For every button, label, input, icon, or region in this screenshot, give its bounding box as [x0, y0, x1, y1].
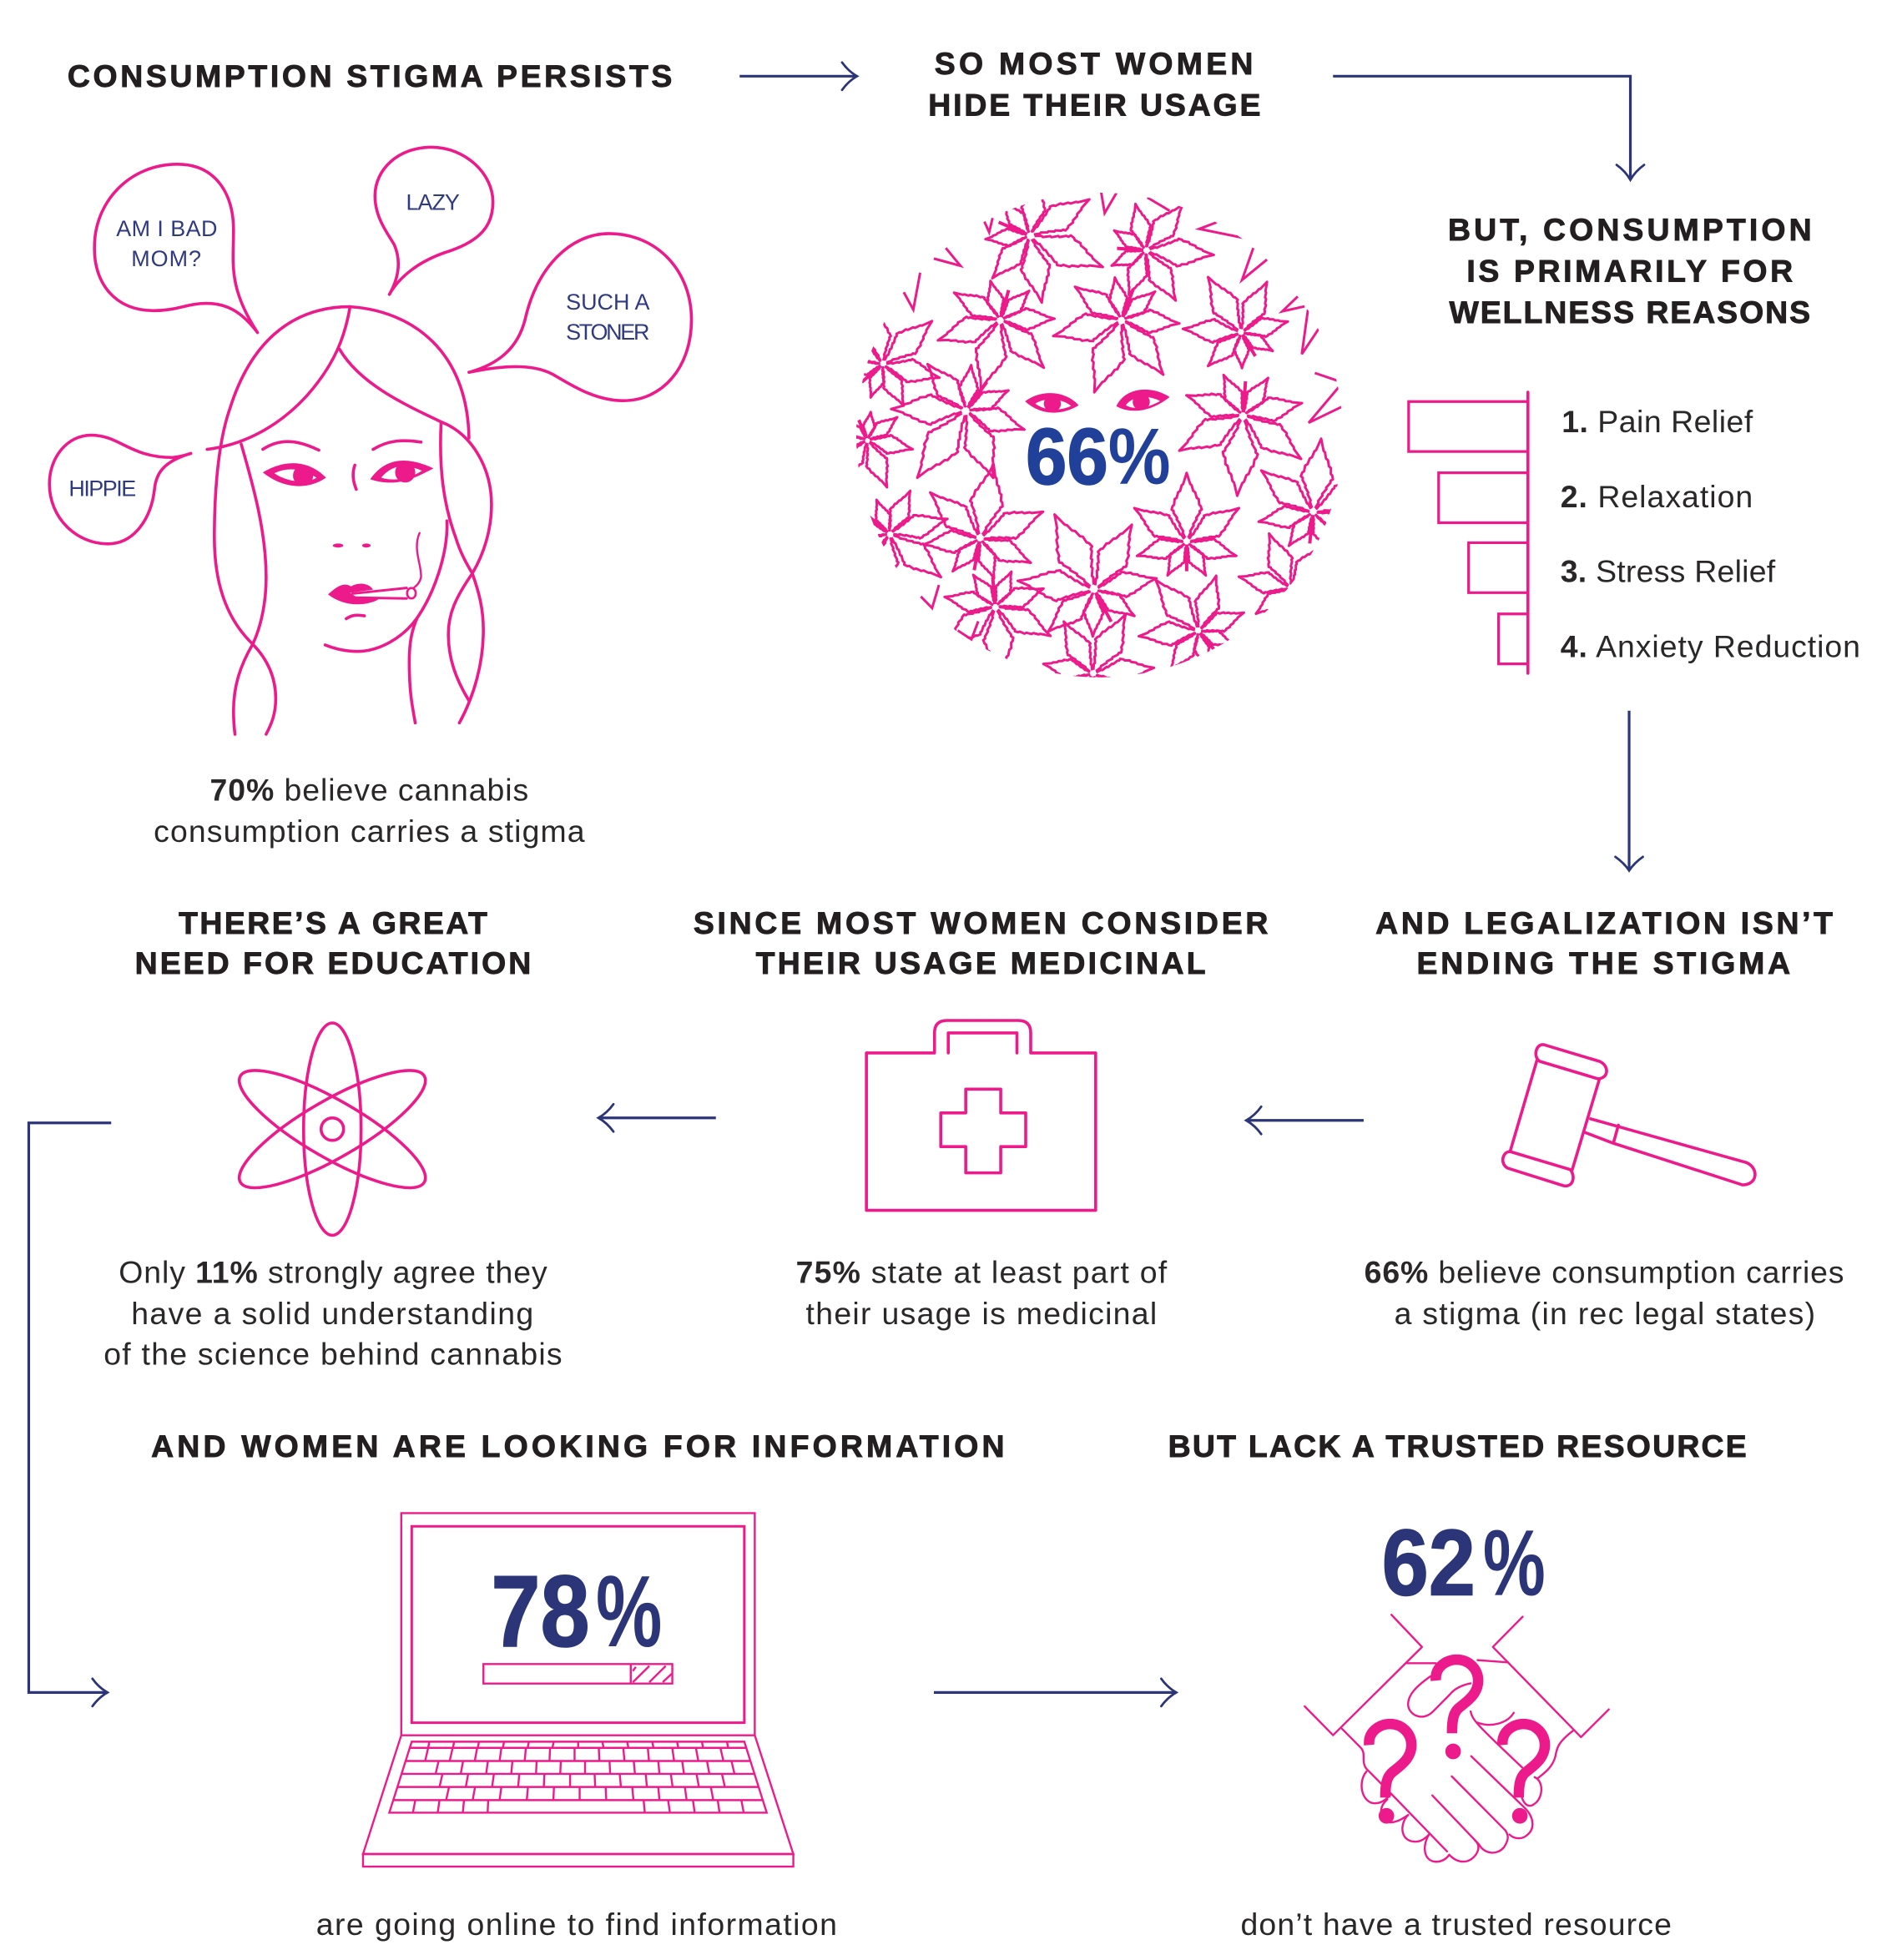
watching eyes: [1025, 390, 1169, 413]
bubble text: such a stoner: [566, 290, 649, 345]
bubble text: am I bad mom: MOM?: [131, 246, 201, 271]
bubble text: am I bad mom: AM I BAD: [116, 216, 217, 241]
stat text: 70 percent: [154, 773, 585, 849]
icon: atom: [226, 1023, 439, 1235]
arrow: medicinal to education: [598, 1104, 716, 1131]
heading: but consumption is primarily for wellness reasons: [1448, 212, 1812, 330]
bubble text: such a stoner: SUCH A: [566, 290, 649, 315]
stat text: 66 percent in legal states: [1365, 1254, 1844, 1331]
stat text: only 11 percent: have a solid understanding: [131, 1296, 533, 1331]
78% stat: %: [596, 1554, 662, 1668]
leaf cluster: [815, 159, 1385, 733]
66% stat: [1026, 412, 1171, 501]
icon: gavel: [1503, 1045, 1755, 1186]
speech bubble outlines: [49, 147, 691, 544]
laptop body: [363, 1513, 794, 1867]
question mark: centre: [1435, 1660, 1478, 1759]
heading: so most women hide their usage: SO MOST WOMEN: [935, 46, 1253, 81]
hands: [1304, 1615, 1609, 1862]
illustration: woman with speech bubbles: [49, 147, 691, 734]
stat text: only 11 percent: Only 11% strongly agree they: [119, 1254, 547, 1289]
question mark: right: [1502, 1724, 1545, 1824]
stat text: only 11 percent: [103, 1254, 563, 1371]
ranked list of reasons: 1. Pain Relief: [1561, 404, 1753, 439]
62% stat: [1382, 1510, 1546, 1615]
arrow: legalization to medicinal: [1246, 1106, 1364, 1134]
bubble text: hippie: HIPPIE: [68, 476, 136, 501]
heading: so most women hide their usage: HIDE THEIR USAGE: [928, 87, 1260, 122]
heading: so most women hide their usage: [928, 46, 1260, 122]
78% stat: [491, 1554, 662, 1668]
heading: there's a great need for education: THERE’S A GREAT: [179, 905, 487, 940]
78% stat: 78: [491, 1554, 590, 1668]
62% stat: 62: [1382, 1510, 1476, 1615]
heading: there's a great need for education: [135, 905, 531, 980]
stat text: 75 percent medicinal: [796, 1254, 1168, 1331]
heading: and legalization isn't ending the stigma: [1375, 905, 1833, 980]
heading: since most women consider their usage medicinal: THEIR USAGE MEDICINAL: [756, 945, 1206, 980]
ranked list of reasons: 3. Stress Relief: [1561, 554, 1776, 589]
bubble text: am I bad mom: [116, 216, 217, 271]
stat text: only 11 percent: of the science behind cannabis: [103, 1336, 563, 1371]
stat text: 66 percent in legal states: a stigma (in rec legal states): [1395, 1296, 1815, 1331]
62% stat: %: [1483, 1510, 1546, 1615]
heading: and legalization isn't ending the stigma: AND LEGALIZATION ISN’T: [1375, 905, 1833, 940]
heading: but consumption is primarily for wellness reasons: IS PRIMARILY FOR: [1466, 254, 1793, 289]
arrow: information to resource: [934, 1679, 1176, 1706]
heading: and legalization isn't ending the stigma: ENDING THE STIGMA: [1417, 945, 1790, 980]
caption: no trusted resource: don’t have a trusted resource: [1240, 1907, 1672, 1942]
stat text: 75 percent medicinal: their usage is medicinal: [806, 1296, 1157, 1331]
icon: laptop with 78%: [363, 1513, 794, 1867]
heading: and women are looking for information: AND WOMEN ARE LOOKING FOR INFORMATION: [151, 1428, 1005, 1464]
face and hair: [207, 307, 492, 734]
caption: going online: are going online to find information: [316, 1907, 837, 1942]
heading: but consumption is primarily for wellness reasons: BUT, CONSUMPTION: [1448, 212, 1812, 247]
bubble text: such a stoner: STONER: [566, 320, 649, 345]
66% stat: %: [1108, 412, 1171, 501]
illustration: circle of cannabis leaves with 66%: [815, 159, 1385, 733]
ranked list of reasons: 2. Relaxation: [1561, 479, 1753, 514]
heading: but lack a trusted resource: BUT LACK A TRUSTED RESOURCE: [1168, 1428, 1747, 1464]
heading: there's a great need for education: NEED FOR EDUCATION: [135, 945, 531, 980]
icon: first aid kit: [866, 1020, 1096, 1211]
stat text: 70 percent: 70% believe cannabis: [210, 773, 528, 808]
progress bar: [483, 1664, 673, 1684]
arrow: wellness to legalization: [1616, 711, 1642, 870]
arrow: education to information: [28, 1123, 111, 1706]
question mark: left: [1369, 1724, 1411, 1824]
ranked list of reasons: [1561, 404, 1860, 663]
heading: consumption stigma persists: CONSUMPTION STIGMA PERSISTS: [68, 58, 672, 93]
heading: since most women consider their usage medicinal: SINCE MOST WOMEN CONSIDER: [694, 905, 1268, 940]
heading: since most women consider their usage medicinal: [694, 905, 1268, 980]
ranked list of reasons: 4. Anxiety Reduction: [1561, 628, 1860, 663]
heading: but consumption is primarily for wellness reasons: WELLNESS REASONS: [1449, 295, 1810, 330]
bubble text: lazy: LAZY: [406, 189, 460, 214]
stat text: 75 percent medicinal: 75% state at least part of: [796, 1254, 1168, 1289]
icon: handshake with question marks: [1304, 1615, 1609, 1862]
arrow: stigma to hiding: [739, 63, 857, 90]
stat text: 66 percent in legal states: 66% believe consumption carries: [1365, 1254, 1844, 1289]
66% stat: 66: [1026, 412, 1108, 501]
arrow: hiding to wellness: [1333, 76, 1644, 180]
bar chart: wellness reasons ranking: [1409, 392, 1528, 673]
keyboard keys: [413, 1741, 744, 1812]
stat text: 70 percent: consumption carries a stigma: [154, 814, 585, 849]
